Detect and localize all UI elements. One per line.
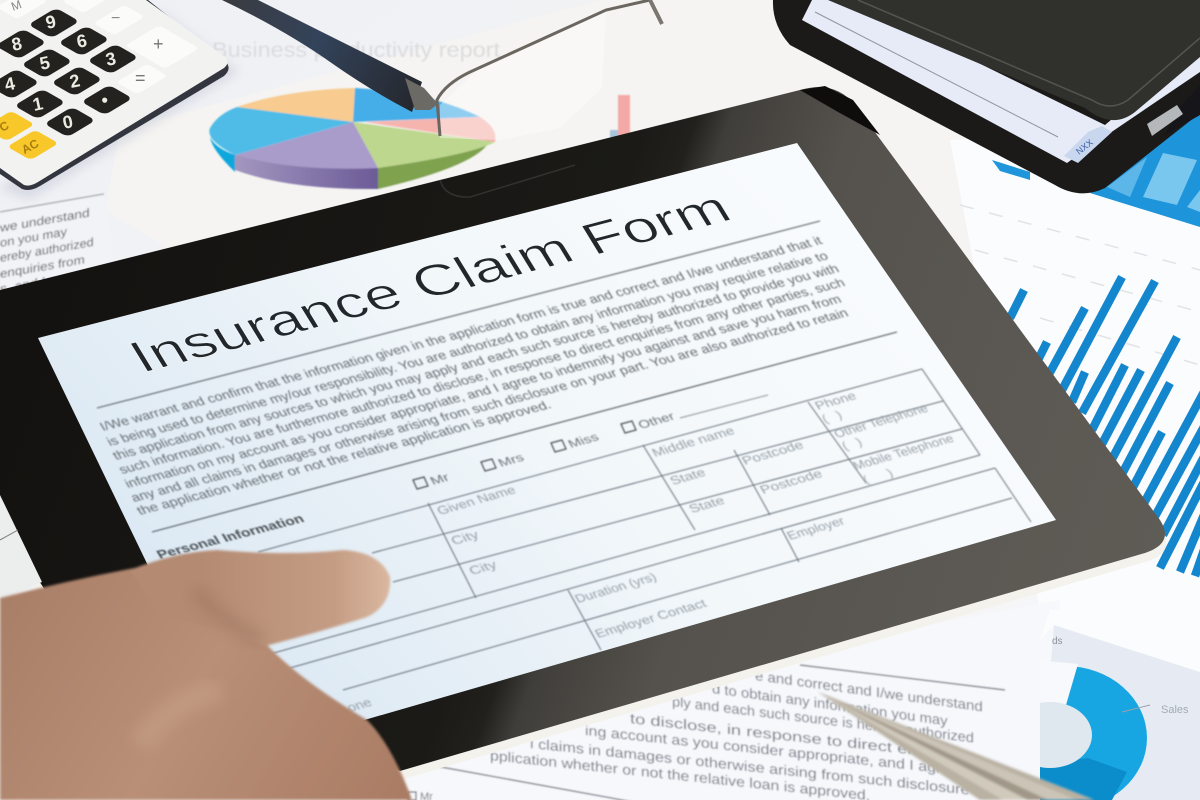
form body text: the application whether or not the relative application is approved. [134, 397, 554, 518]
form body text: is being used to determine my/our responsibility. You are authorized to obtain any information you may require relative to [104, 249, 831, 449]
calculator: AC [19, 136, 41, 157]
key digits: 0 [61, 111, 75, 133]
personal information heading: Personal Information [154, 511, 307, 562]
yellow keys [7, 130, 59, 160]
paper: lower report text: pplication whether or not the relative loan is approved. [490, 747, 870, 800]
left paper corner [0, 495, 42, 600]
bezel reflection [800, 86, 880, 135]
paper: upper left text: s, and I agree [0, 267, 85, 296]
paper: donut chart [1040, 625, 1200, 800]
glasses [222, 0, 662, 140]
key digits: 4 [3, 73, 17, 95]
paper: lower report text: d to obtain any information you may [712, 680, 948, 729]
paper: lower report text: to disclose, in response to direct enquiries [630, 710, 972, 764]
paper: upper left text: enquiries from [0, 252, 85, 281]
form title: Insurance Claim Form [120, 183, 740, 382]
paper: upper left text: ereby authorized [0, 235, 94, 265]
form body text: this application from any sources to which you may apply and each such source is hereby authorized to provide you with [110, 261, 842, 463]
number keys [0, 8, 139, 137]
donut [1040, 662, 1147, 800]
key digits: 9 [44, 11, 58, 33]
index finger [130, 550, 390, 646]
pie sides [210, 137, 235, 172]
form body text: I/We warrant and confirm that the information given in the application form is true and correct and I/we understand that it [97, 233, 825, 434]
checkbox: Mr [408, 791, 433, 800]
temple arm [222, 0, 422, 112]
paper: upper left text: on you may [0, 224, 67, 250]
form table labels: City [448, 528, 482, 548]
paper: lower report text: ply and each such source is hereby authorized [672, 693, 974, 746]
paper: lower report text: l claims in damages or otherwise arising from such disclosure [530, 735, 970, 798]
form table labels: Given Name [434, 483, 518, 518]
key digits: 1 [31, 93, 45, 115]
calculator: − [111, 10, 120, 27]
screen [38, 143, 1056, 756]
sales label: Sales [1161, 704, 1189, 716]
key digits: 2 [68, 70, 82, 92]
pie slices [237, 88, 355, 122]
calculator: = [135, 68, 146, 88]
key digits: 5 [38, 52, 52, 74]
pie chart [209, 88, 495, 189]
binder pages [802, 0, 1200, 163]
form table labels: Other Telephone [831, 402, 931, 441]
form table labels: Phone [812, 389, 859, 413]
form checkboxes: Miss [565, 430, 601, 451]
white keys [0, 0, 199, 94]
index tab: NXX [1074, 137, 1095, 157]
red chart bar [610, 95, 630, 138]
paper: lower report text [400, 600, 1060, 800]
knuckle shadow [195, 590, 262, 640]
form table labels [344, 389, 957, 715]
lens [440, 10, 606, 140]
hand back [0, 567, 412, 800]
form table labels: State [667, 466, 708, 488]
leather cover [828, 0, 1200, 120]
form table labels: Duration (yrs) [572, 570, 659, 606]
form table labels: State [686, 494, 727, 516]
form body text: such information. You are furthermore authorized to disclose, in response to direct enquiries from any other parties, such [116, 275, 848, 477]
key digits [3, 11, 118, 133]
form table labels: Postcode [757, 467, 825, 497]
key digits: 3 [104, 48, 118, 70]
form table labels: ( ) [839, 435, 865, 453]
form checkboxes: Other [635, 410, 677, 432]
form table labels: Employer [784, 514, 847, 543]
form table labels: Mobile Telephone [850, 432, 957, 473]
hinge [405, 78, 438, 110]
report heading: Business productivity report [212, 39, 500, 62]
silver pen [818, 692, 1095, 800]
blue bar chart [1010, 277, 1200, 576]
wire frame [437, 0, 650, 136]
hand pointing at form [0, 550, 412, 800]
form table labels: Employer Contact [592, 597, 710, 641]
binder [773, 0, 1200, 193]
form table grid [258, 369, 1031, 690]
paper: upper left text: we understand [0, 206, 90, 235]
knuckle highlight [140, 690, 220, 745]
form table labels: City [466, 558, 500, 578]
calculator body [0, 0, 229, 190]
paper: upper left text [0, 194, 120, 320]
form table labels: one [344, 696, 375, 715]
form table labels: ( ) [860, 466, 896, 487]
key digits: 8 [10, 33, 24, 55]
form table labels: ( ) [819, 408, 845, 426]
form checkboxes: Mr [427, 471, 452, 488]
calculator: + [153, 34, 164, 54]
key digits: • [100, 90, 110, 111]
form body text [97, 221, 851, 518]
paper: lower report text: ing account as you consider appropriate, and I agree [585, 722, 959, 778]
key digits: 6 [75, 30, 89, 52]
calculator [0, 0, 240, 200]
form checkboxes [152, 332, 897, 532]
paper: lower report text: e and correct and I/we understand [755, 667, 983, 715]
dashed grid lines [960, 205, 1200, 365]
form table labels: Postcode [739, 438, 806, 468]
form table labels: Middle name [649, 424, 737, 460]
sales label [1122, 704, 1189, 716]
binder back cover [773, 0, 1200, 193]
index tab [1064, 126, 1112, 163]
pen clip in binder [1147, 85, 1200, 136]
paper: donut chart: ds [1052, 636, 1063, 647]
form checkboxes: Mrs [495, 451, 527, 470]
paper: right report [950, 110, 1200, 640]
top right blue chart [992, 110, 1200, 227]
form body text: any and all claims in damages or otherwise arising from such disclosure on your part. You are also authorized to retain [128, 306, 851, 505]
form body text: information on my account as you consider appropriate, and I agree to indemnify you against and save you harm from [122, 292, 844, 491]
